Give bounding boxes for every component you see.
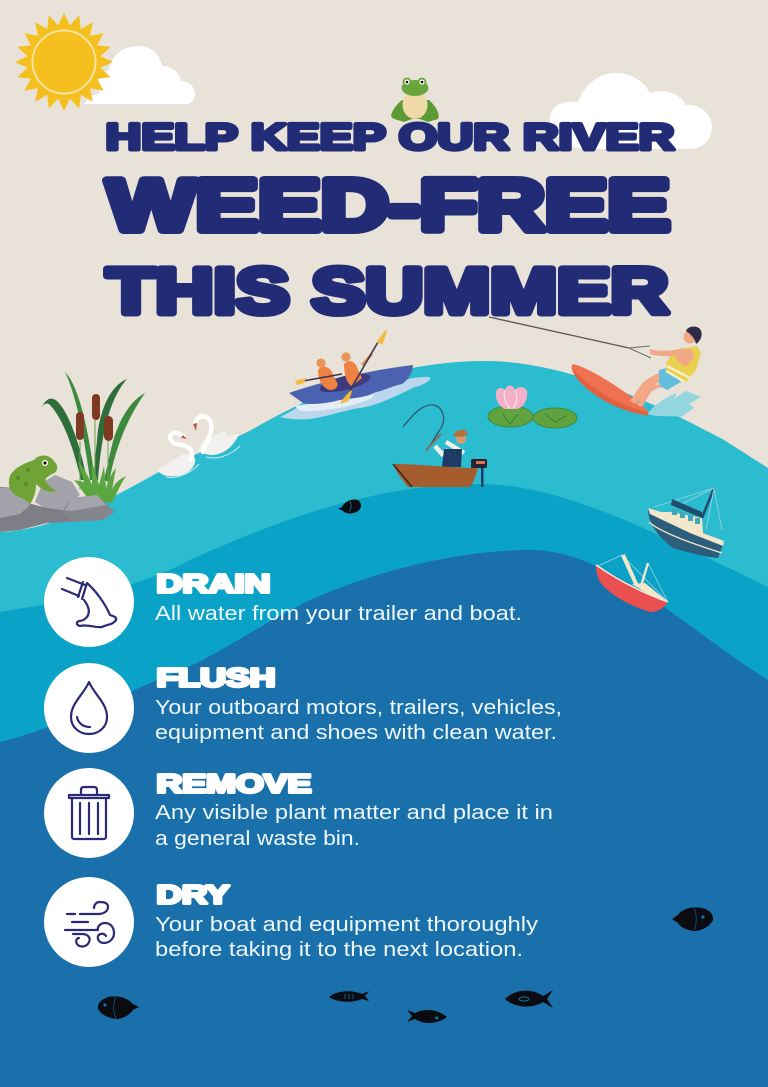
text: flush description — [155, 696, 562, 744]
wave: light teal — [0, 361, 768, 1087]
cloud: left — [84, 46, 195, 104]
text: remove description — [155, 801, 553, 850]
text: dry description: Your boat and equipment thoroughly — [155, 913, 539, 936]
text: flush description: equipment and shoes with clean water. — [155, 721, 557, 744]
red boat — [596, 555, 668, 612]
text: dry description: before taking it to the next location. — [155, 938, 523, 961]
heading: remove: REMOVE — [156, 770, 312, 798]
fish: right — [672, 907, 713, 931]
text: dry description — [155, 913, 539, 961]
swans — [157, 416, 240, 477]
icon: wind — [65, 902, 114, 946]
icon: frog on title — [391, 78, 439, 122]
title: THIS SUMMER — [106, 255, 668, 327]
title: HELP KEEP OUR RIVER — [106, 116, 674, 158]
wave: mid blue — [0, 484, 768, 1087]
fish: bottom right — [505, 990, 553, 1008]
fisherman in boat — [393, 405, 487, 487]
fish: near boat — [338, 499, 361, 514]
icon: water drop — [71, 682, 107, 734]
water lily — [488, 386, 577, 428]
icon: drain pipe — [62, 578, 116, 627]
heading: flush: FLUSH — [156, 664, 276, 692]
wave: deep blue — [0, 550, 768, 1087]
step 1: drain — [44, 557, 522, 647]
text: remove description: a general waste bin. — [155, 827, 360, 850]
step 2: flush — [44, 663, 562, 753]
heading: drain: DRAIN — [156, 570, 270, 598]
text: flush description: Your outboard motors, trailers, vehicles, — [155, 696, 562, 719]
reeds with cattails — [42, 372, 145, 503]
fish: bottom centre — [329, 991, 369, 1002]
cloud: right — [550, 73, 712, 149]
rocks — [0, 475, 115, 532]
heading: dry: DRY — [156, 882, 230, 910]
frog on rock — [9, 456, 57, 504]
water skier — [489, 317, 702, 417]
icon: sun — [15, 13, 113, 111]
step 3: remove — [44, 768, 553, 858]
fish: bottom left — [98, 996, 139, 1019]
title — [106, 116, 674, 327]
fish: bottom middle — [407, 1010, 447, 1023]
fishing trawler — [648, 488, 724, 558]
kayak with two paddlers — [280, 331, 430, 419]
text: remove description: Any visible plant matter and place it in — [155, 801, 553, 824]
text: drain description: All water from your trailer and boat. — [155, 602, 522, 625]
icon: bin — [69, 787, 109, 839]
title: WEED-FREE — [107, 166, 670, 246]
step 4: dry — [44, 877, 539, 967]
